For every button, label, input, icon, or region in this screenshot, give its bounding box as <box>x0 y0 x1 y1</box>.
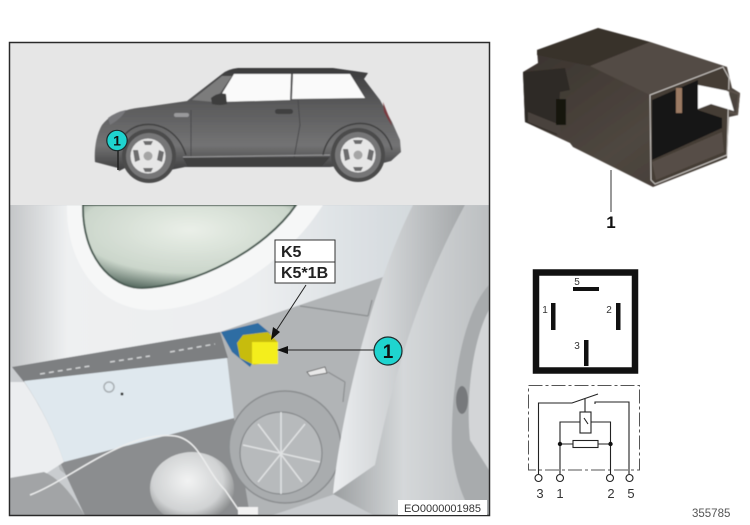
windows <box>219 74 291 102</box>
callout: number 1 on car <box>107 130 127 170</box>
panel: vehicle side view <box>10 43 489 205</box>
inner wheel arch <box>30 277 383 516</box>
rear wheel <box>331 128 385 182</box>
pin layout diagram <box>536 272 635 370</box>
circuit schematic: 5 <box>627 486 635 501</box>
yellow relay <box>237 332 278 365</box>
arrow: label to relay <box>271 285 306 340</box>
image code label <box>398 500 487 515</box>
frame <box>10 42 490 516</box>
circuit schematic <box>528 386 640 501</box>
circuit schematic: 1 <box>556 486 564 501</box>
blue connector <box>221 323 270 367</box>
pin layout diagram: 1 <box>542 305 548 316</box>
pin layout diagram: 2 <box>606 305 612 316</box>
bay and bulb <box>60 418 250 516</box>
image code label: EO0000001985 <box>404 503 481 515</box>
headlight ring <box>67 205 323 310</box>
illustration: car side view <box>95 68 401 183</box>
left lower panel <box>10 382 64 480</box>
callout: number 1 on car: 1 <box>113 132 121 148</box>
pin layout diagram: 3 <box>574 341 580 352</box>
small clip <box>307 367 327 376</box>
circuit schematic: 2 <box>607 486 615 501</box>
arrow: callout to relay <box>277 346 375 354</box>
callout: number 1 <box>374 337 402 365</box>
label: K5 and K5*1B <box>275 240 335 283</box>
label: K5 and K5*1B: K5 <box>281 244 302 261</box>
cover panel <box>24 358 234 462</box>
dark strip <box>12 332 228 382</box>
callout: number 1: 1 <box>383 342 394 363</box>
leader line and number 1: 1 <box>606 213 616 232</box>
relay window <box>698 85 734 111</box>
body surround <box>10 205 420 367</box>
front wheel <box>122 129 176 183</box>
relay opening <box>650 67 729 184</box>
round service cover <box>229 391 341 503</box>
headlight lens <box>83 205 296 288</box>
leader line and number 1 <box>606 170 616 232</box>
illustration: relay component <box>523 28 740 187</box>
panel: engine bay detail <box>10 205 489 524</box>
label: K5 and K5*1B: K5*1B <box>281 265 328 282</box>
pin layout diagram: 5 <box>574 277 580 288</box>
fender <box>333 205 465 494</box>
reference number: 355785 <box>692 508 730 520</box>
tyre side shape <box>452 285 489 516</box>
circuit schematic: 3 <box>536 486 544 501</box>
